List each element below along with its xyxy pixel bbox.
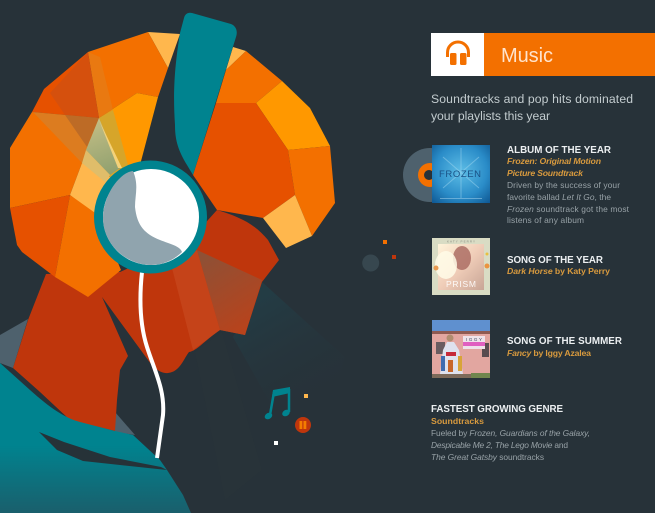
album entry text: listens of any album [507,215,584,225]
album entry text: ALBUM OF THE YEAR [507,145,611,156]
light beams behind head [195,282,345,500]
decorative dots [274,240,396,445]
music note icon [264,387,291,421]
fastest growing genre text: Soundtracks [431,416,484,426]
song of the summer text: Fancy by Iggy Azalea [507,348,591,358]
album entry text: favorite ballad Let It Go, the [507,192,611,202]
heading: Music: Music [501,45,553,67]
intro text: your playlists this year [431,109,550,123]
ear cup [94,160,207,274]
song of the year text: SONG OF THE YEAR [507,255,603,266]
intro text: Soundtracks and pop hits dominated [431,92,633,106]
neck shadow [0,319,135,435]
song of the summer text [507,336,622,358]
album cover: Frozen: FROZEN [439,169,481,180]
album entry text [507,145,630,225]
fastest growing genre text: The Great Gatsby soundtracks [431,452,544,462]
translucent facet beams [33,52,128,182]
illustration: headphone listener [0,13,335,513]
orange facets [10,32,335,297]
album entry text: Driven by the success of your [507,180,620,190]
album cover: Frozen [432,145,490,203]
album cover: Fancy [432,320,490,378]
fastest growing genre text [431,404,590,462]
teal jacket [0,363,191,513]
song of the year text [507,255,610,276]
album entry text: Frozen: Original Motion [507,156,601,166]
header bar [431,33,655,76]
intro text [431,92,633,123]
album cover: Fancy: IGGY [466,337,482,342]
album entry text: Picture Soundtrack [507,168,584,178]
red beams [172,250,262,350]
fastest growing genre text: FASTEST GROWING GENRE [431,404,563,415]
album cover: Prism: PRISM [446,279,476,289]
headband [174,13,237,175]
song of the year text: Dark Horse by Katy Perry [507,266,610,276]
red hair and neck [13,210,279,431]
fastest growing genre text: Fueled by Frozen, Guardians of the Galaxy, [431,428,590,438]
song of the summer text: SONG OF THE SUMMER [507,336,622,347]
fastest growing genre text: Despicable Me 2, The Lego Movie and [431,440,568,450]
album cover: Prism [432,238,490,295]
album cover: Prism: KATY PERRY [447,240,475,244]
pause button icon [295,417,311,433]
album entry text: Frozen soundtrack got the most [507,204,630,214]
jacket collar shadow [39,432,167,470]
headphone cord [140,272,163,458]
vinyl disc [403,148,457,202]
icon: headphones [448,42,468,65]
